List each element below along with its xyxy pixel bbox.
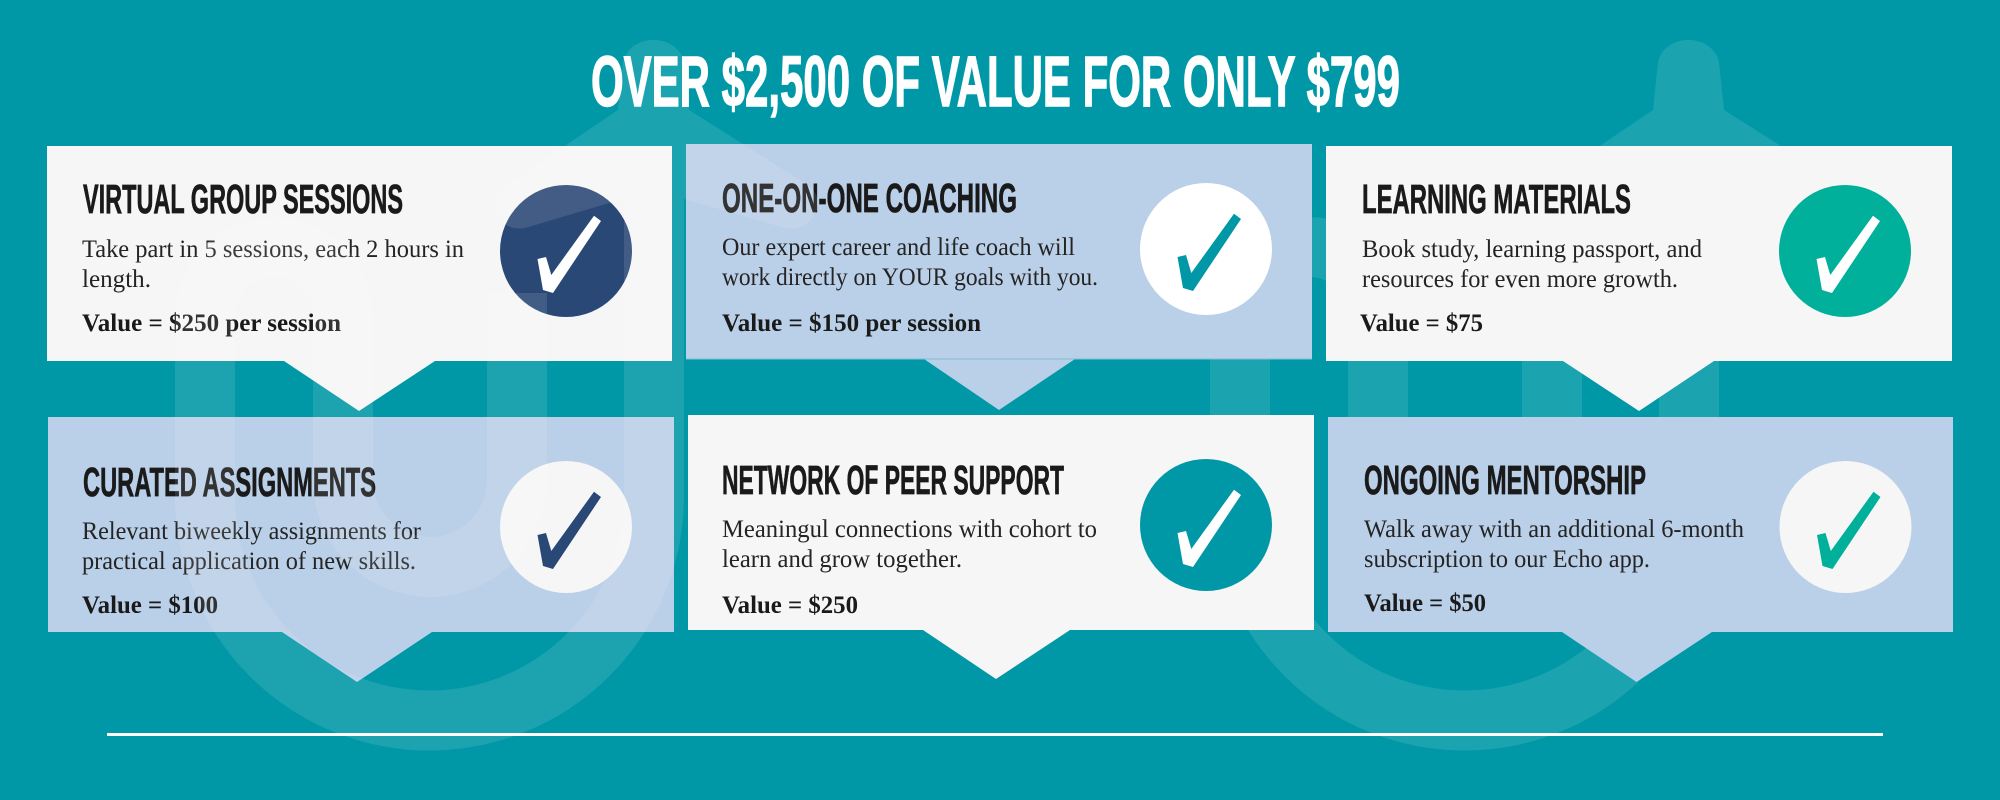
description — [82, 518, 422, 575]
card shape — [688, 415, 1314, 679]
panel: curated assignments — [48, 417, 674, 682]
value: Value = $50 — [1364, 590, 1486, 617]
heading: ONGOING MENTORSHIP — [1364, 457, 1646, 503]
heading: LEARNING MATERIALS — [1362, 176, 1631, 222]
description: Walk away with an additional 6-month — [1364, 516, 1744, 543]
description: work directly on YOUR goals with you. — [722, 264, 1098, 291]
card shape — [686, 144, 1312, 410]
footer rule — [107, 733, 1883, 736]
description: practical application of new skills. — [82, 548, 416, 575]
heading: NETWORK OF PEER SUPPORT — [722, 457, 1064, 503]
description — [722, 234, 1098, 291]
icon: check circle — [500, 461, 632, 593]
description: subscription to our Echo app. — [1364, 546, 1650, 573]
description — [722, 516, 1097, 573]
icon: check circle — [1780, 461, 1912, 593]
panel: virtual group sessions — [47, 146, 672, 411]
panel: learning materials — [1326, 146, 1952, 411]
panel: one-on-one coaching — [686, 144, 1312, 410]
card shape — [1328, 417, 1953, 682]
background arrow shape overlay: left — [205, 40, 818, 721]
description: Take part in 5 sessions, each 2 hours in — [82, 236, 464, 263]
description — [82, 236, 464, 293]
icon: check circle — [500, 185, 632, 317]
heading: ONE-ON-ONE COACHING — [722, 175, 1017, 221]
title: OVER $2,500 OF VALUE FOR ONLY $799 — [591, 43, 1400, 122]
card shape — [1326, 146, 1952, 411]
icon: check circle — [1140, 183, 1272, 315]
description: Relevant biweekly assignments for — [82, 518, 422, 545]
panel: ongoing mentorship — [1328, 417, 1953, 682]
value: Value = $250 per session — [82, 310, 341, 337]
card shape — [48, 417, 674, 682]
card shape — [47, 146, 672, 411]
value: Value = $150 per session — [722, 310, 981, 337]
value: Value = $75 — [1360, 310, 1483, 337]
description: resources for even more growth. — [1362, 266, 1678, 293]
heading: VIRTUAL GROUP SESSIONS — [83, 176, 403, 222]
value: Value = $250 — [722, 592, 858, 619]
description — [1362, 236, 1702, 293]
description — [1364, 516, 1744, 573]
heading: CURATED ASSIGNMENTS — [83, 459, 376, 505]
description: length. — [82, 266, 151, 293]
description: Meaningul connections with cohort to — [722, 516, 1097, 543]
background arrow shape: right — [1240, 40, 1853, 721]
description: Our expert career and life coach will — [722, 234, 1075, 261]
value: Value = $100 — [82, 592, 218, 619]
description: Book study, learning passport, and — [1362, 236, 1702, 263]
description: learn and grow together. — [722, 546, 962, 573]
icon: check circle — [1140, 459, 1272, 591]
icon: check circle — [1779, 185, 1911, 317]
panel: network of peer support — [688, 415, 1314, 679]
